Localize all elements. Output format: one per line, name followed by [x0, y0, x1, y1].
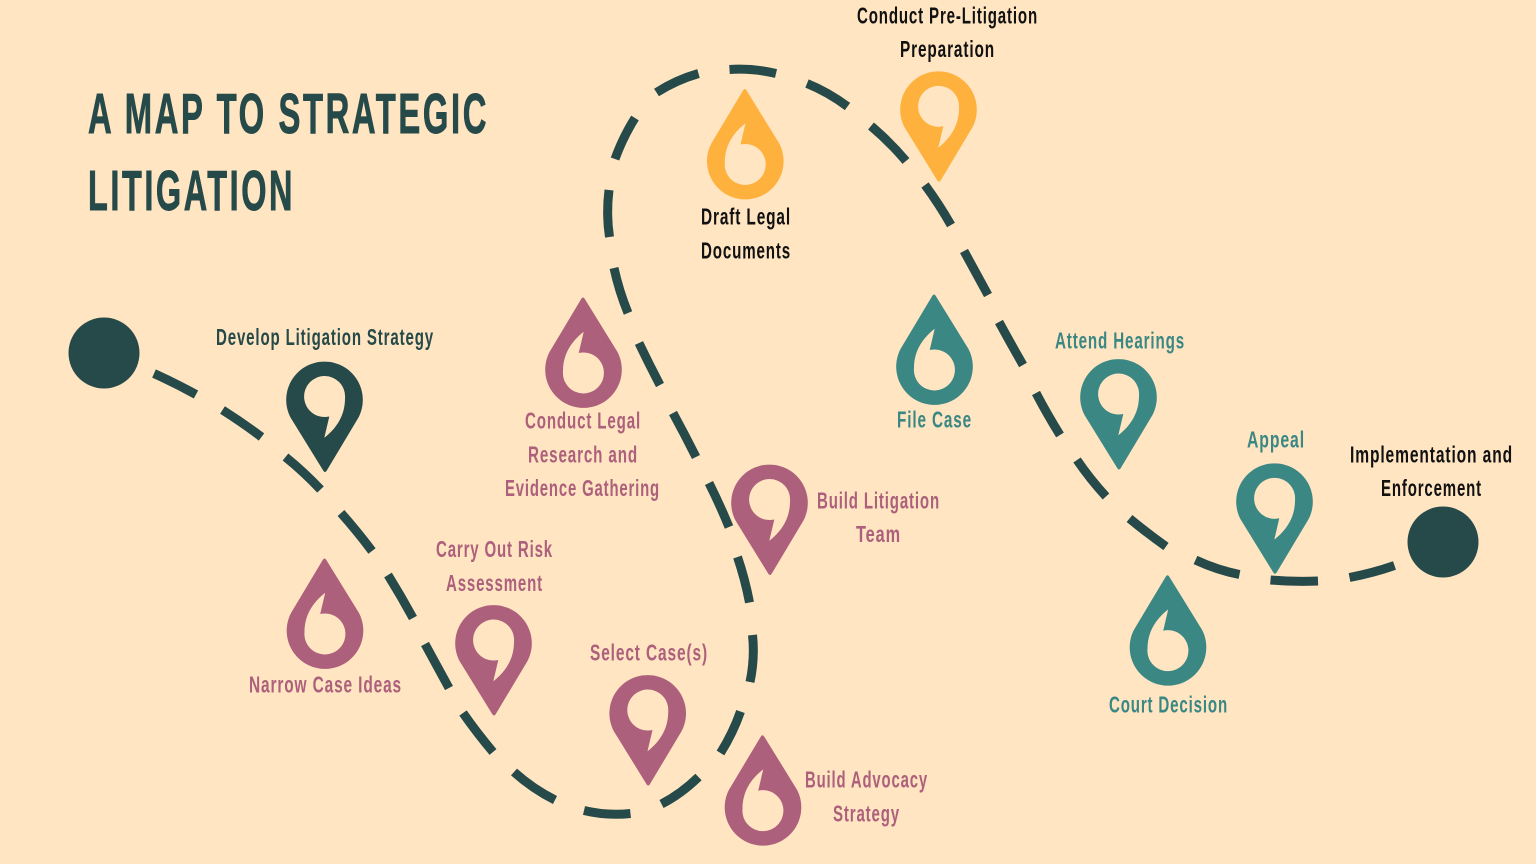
label: build advocacy strategy: Build Advocacy: [805, 766, 928, 792]
label: carry out risk assessment: [436, 536, 553, 596]
label: implementation and enforcement: [1350, 442, 1513, 501]
pin: select cases: [609, 675, 686, 786]
label: implementation and enforcement: Enforcement: [1381, 475, 1482, 501]
pin: conduct pre-litigation preparation: [900, 71, 977, 182]
start point: [68, 318, 140, 388]
pin: attend hearings: [1080, 359, 1157, 470]
label: conduct legal research: Research and: [528, 442, 638, 468]
label: draft legal documents: [701, 204, 791, 264]
drop: narrow case ideas: [287, 558, 363, 669]
label: draft legal documents: Draft Legal: [701, 204, 791, 230]
label: conduct legal research: [505, 408, 660, 501]
label: build advocacy strategy: Strategy: [833, 800, 900, 826]
label: carry out risk assessment: Assessment: [446, 570, 543, 596]
label: conduct pre-litigation preparation: [857, 2, 1038, 62]
pin: develop litigation strategy: [286, 362, 363, 472]
dashed route: [154, 69, 1394, 814]
label: conduct pre-litigation preparation: Conduct Pre-Litigation: [857, 2, 1038, 28]
drop: draft legal documents: [707, 89, 784, 199]
label: conduct legal research: Evidence Gathering: [505, 475, 660, 501]
label: conduct legal research: Conduct Legal: [525, 408, 641, 434]
label: build litigation team: Build Litigation: [817, 488, 940, 514]
label: narrow case ideas: Narrow Case Ideas: [249, 672, 402, 698]
label: build litigation team: [817, 488, 940, 547]
end point: [1408, 506, 1478, 578]
label: build litigation team: Team: [856, 521, 901, 547]
label: appeal: Appeal: [1247, 426, 1305, 452]
title: [88, 82, 489, 223]
label: file case: File Case: [897, 406, 972, 432]
pin: carry out risk assessment: [455, 605, 532, 716]
label: attend hearings: Attend Hearings: [1055, 328, 1185, 354]
pin: build litigation team: [731, 465, 808, 575]
label: develop litigation strategy: Develop Litigation Strategy: [216, 324, 434, 350]
pin: appeal: [1236, 463, 1313, 574]
drop: build advocacy strategy: [725, 735, 801, 846]
label: draft legal documents: Documents: [701, 238, 791, 264]
drop: court decision: [1130, 575, 1206, 686]
label: build advocacy strategy: [805, 766, 928, 826]
label: court decision: Court Decision: [1109, 692, 1228, 718]
drop: conduct legal research: [545, 298, 622, 408]
drop: file case: [896, 294, 973, 405]
label: select cases: Select Case(s): [590, 640, 708, 666]
title: LITIGATION: [88, 159, 295, 223]
label: conduct pre-litigation preparation: Preparation: [900, 36, 995, 62]
title: A MAP TO STRATEGIC: [88, 82, 489, 146]
label: carry out risk assessment: Carry Out Risk: [436, 536, 553, 562]
